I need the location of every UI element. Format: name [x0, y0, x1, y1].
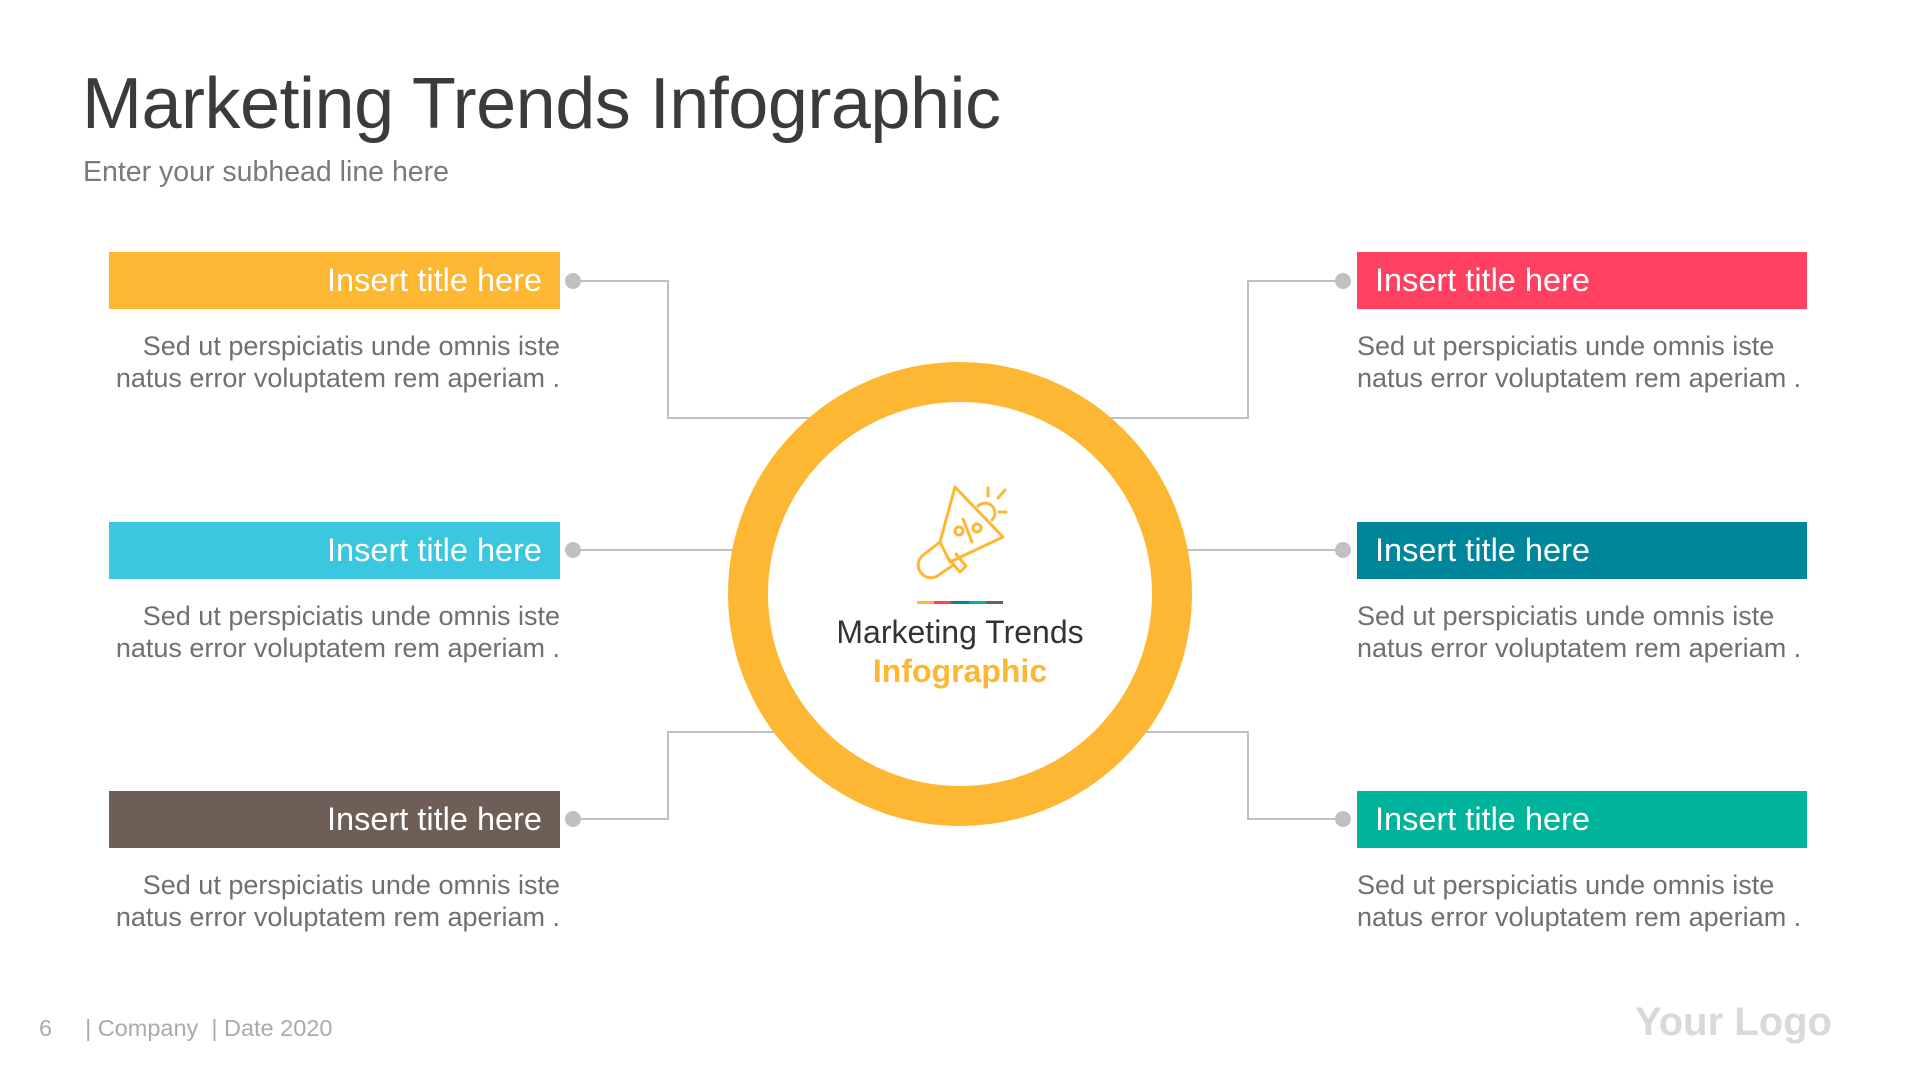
text: Sed ut perspiciatis unde omnis iste [1357, 331, 1774, 361]
title bar [1357, 522, 1807, 579]
text: natus error voluptatem rem aperiam . [1357, 902, 1801, 932]
text [116, 870, 560, 932]
panel: left 1 [109, 252, 560, 393]
text: natus error voluptatem rem aperiam . [116, 633, 560, 663]
title bar [109, 252, 560, 309]
panel: left 3 [109, 791, 560, 932]
text: Sed ut perspiciatis unde omnis iste [143, 331, 560, 361]
text [1357, 601, 1801, 663]
title bar: Insert title here [1375, 801, 1590, 837]
text: natus error voluptatem rem aperiam . [1357, 363, 1801, 393]
title bar: Insert title here [1375, 262, 1590, 298]
title bar [109, 522, 560, 579]
text [116, 601, 560, 663]
text [1357, 331, 1801, 393]
title bar [109, 791, 560, 848]
ring [748, 382, 1172, 806]
title bar: Insert title here [327, 262, 542, 298]
title bar [1357, 252, 1807, 309]
text: Sed ut perspiciatis unde omnis iste [143, 870, 560, 900]
logo: Your Logo [1635, 1000, 1832, 1044]
text [1357, 870, 1801, 932]
panel: right 2 [1357, 522, 1807, 663]
icon: megaphone [916, 486, 1008, 580]
panel: left 2 [109, 522, 560, 663]
text [116, 331, 560, 393]
title bar: Insert title here [327, 532, 542, 568]
text: Sed ut perspiciatis unde omnis iste [1357, 601, 1774, 631]
subhead: Enter your subhead line here [83, 156, 449, 188]
text: natus error voluptatem rem aperiam . [116, 902, 560, 932]
text: natus error voluptatem rem aperiam . [116, 363, 560, 393]
color bar [917, 601, 1003, 604]
center text: Marketing Trends [836, 614, 1084, 650]
footer: 6 | Company | Date 2020 [39, 1015, 332, 1041]
title bar: Insert title here [1375, 532, 1590, 568]
title bar: Insert title here [327, 801, 542, 837]
center text [836, 614, 1084, 689]
text: natus error voluptatem rem aperiam . [1357, 633, 1801, 663]
text: Sed ut perspiciatis unde omnis iste [143, 601, 560, 631]
title: Marketing Trends Infographic [82, 64, 1000, 144]
center text: Infographic [873, 653, 1047, 689]
text: Sed ut perspiciatis unde omnis iste [1357, 870, 1774, 900]
panel: right 3 [1357, 791, 1807, 932]
title bar [1357, 791, 1807, 848]
panel: right 1 [1357, 252, 1807, 393]
